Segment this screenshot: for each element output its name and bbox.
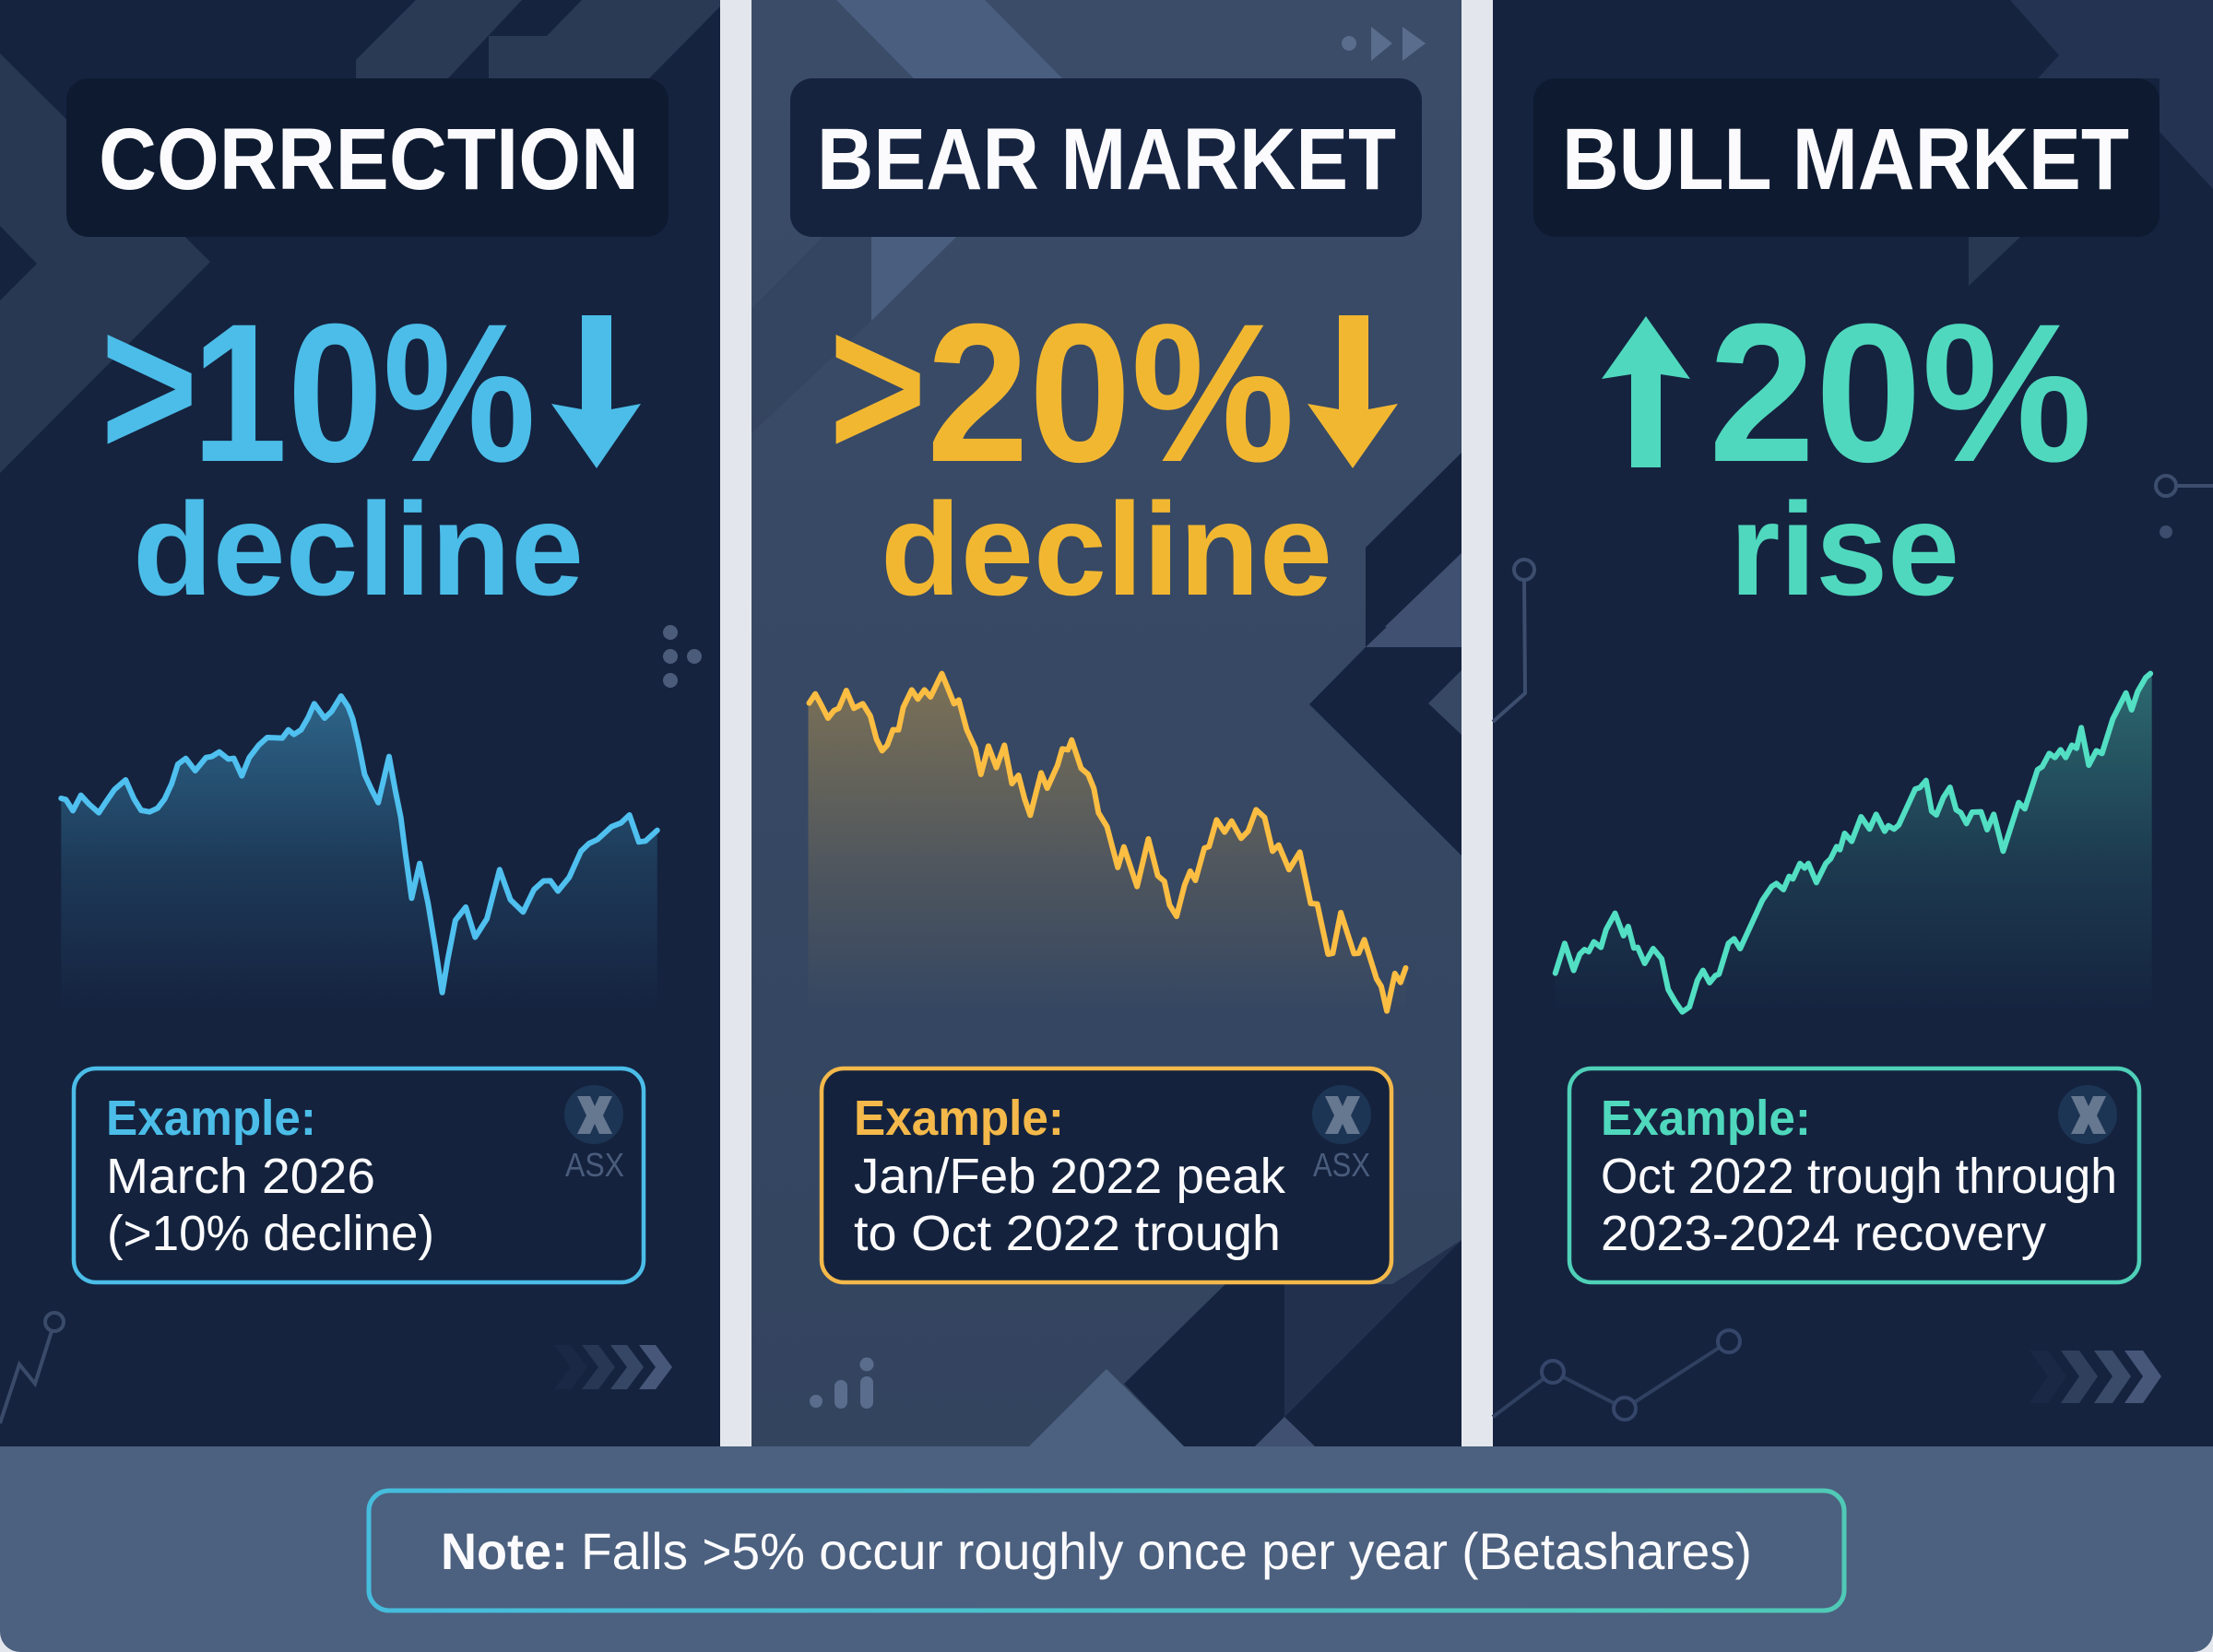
area chart: bull market (1556, 674, 2152, 1012)
icon: ASX logo (1312, 1085, 1371, 1184)
note box: Note: (441, 1522, 568, 1580)
metric: greater than 20 percent: 20% (927, 283, 1295, 503)
example box: bull market: Example: (1601, 1091, 1811, 1146)
example box: bull market: Oct 2022 trough through (1601, 1149, 2117, 1204)
example box: bear market (822, 1068, 1391, 1282)
area chart: bear market (809, 674, 1405, 1011)
label: decline: decline (133, 477, 584, 623)
panel: bull market (1493, 0, 2213, 1447)
metric: greater than 20 percent (829, 273, 1398, 503)
icon: up arrow (1602, 316, 1690, 467)
example box: bear market: to Oct 2022 trough (854, 1206, 1281, 1261)
panel: bear market (751, 0, 1462, 1447)
heading box: bull market: BULL MARKET (1562, 111, 2129, 208)
metric: greater than 10 percent: 10% (192, 283, 536, 503)
example box: correction (74, 1068, 644, 1282)
example box: correction: Example: (106, 1091, 316, 1146)
heading box: correction (66, 78, 669, 237)
icon: down arrow (1308, 315, 1398, 468)
example box: bear market: Example: (854, 1091, 1064, 1146)
footer band (0, 1446, 2213, 1652)
example box: correction: March 2026 (106, 1149, 375, 1204)
area chart: correction (61, 696, 657, 1009)
heading box: bear market (790, 78, 1422, 237)
icon: ASX logo (2058, 1085, 2117, 1144)
icon: ASX logo (564, 1085, 624, 1184)
example box: bear market: Jan/Feb 2022 peak (854, 1149, 1286, 1204)
metric: greater than 10 percent (101, 273, 641, 503)
panel: correction (0, 0, 720, 1447)
label: rise: rise (1730, 477, 1959, 623)
example box: bull market: 2023-2024 recovery (1601, 1206, 2046, 1261)
heading box: bear market: BEAR MARKET (817, 111, 1396, 208)
metric: 20 percent rise: 20% (1709, 283, 2092, 503)
note box (369, 1491, 1844, 1611)
example box: bull market (1569, 1068, 2139, 1282)
icon: down arrow (551, 315, 641, 468)
icon: ASX logo: ASX (565, 1146, 624, 1184)
label: decline: decline (881, 477, 1332, 623)
icon: ASX logo: ASX (1313, 1146, 1370, 1184)
heading box: correction: CORRECTION (99, 111, 639, 208)
heading box: bull market (1533, 78, 2160, 237)
note box: Falls >5% occur roughly once per year (Betashares) (581, 1522, 1752, 1580)
example box: correction: (>10% decline) (107, 1206, 434, 1261)
metric: greater than 20 percent: > (829, 273, 927, 500)
metric: greater than 10 percent: > (101, 273, 198, 500)
